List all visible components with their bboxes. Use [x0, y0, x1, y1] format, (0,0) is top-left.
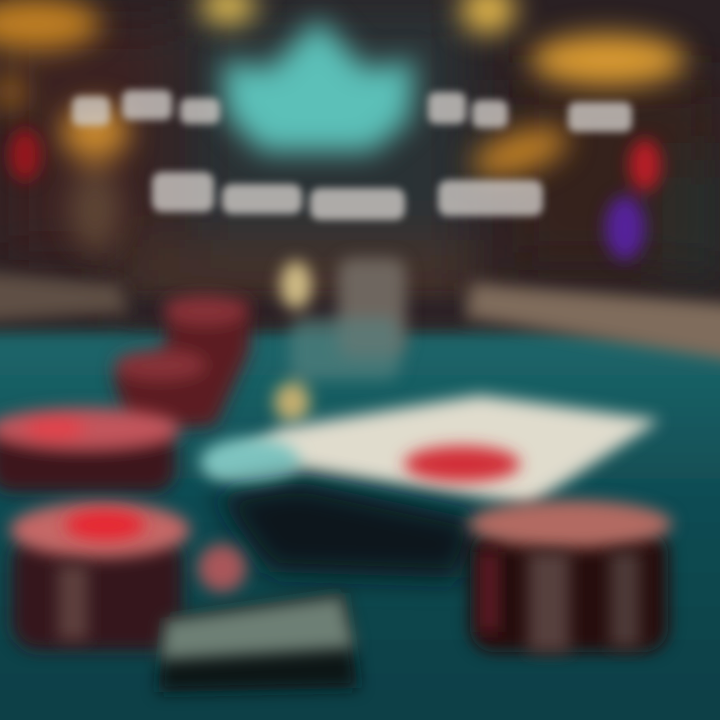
coloured lights — [9, 129, 661, 260]
hanging lamps — [0, 0, 686, 252]
teal crown emblem — [222, 18, 415, 152]
blurred headline, illegible in the reference — [72, 90, 632, 220]
table rail — [0, 272, 720, 362]
white playing card with red mark — [200, 395, 660, 505]
background wall — [0, 0, 720, 340]
chip stack: bottom right — [468, 500, 672, 652]
table felt — [0, 332, 720, 720]
chip stack: back — [112, 295, 250, 432]
chip stack: bottom left — [10, 502, 246, 650]
glass and candle on table — [274, 258, 406, 422]
dark shadow under card — [215, 482, 480, 578]
card deck at bottom — [158, 592, 358, 692]
wall colour patches — [0, 0, 720, 310]
chip stack: left middle — [0, 408, 180, 492]
